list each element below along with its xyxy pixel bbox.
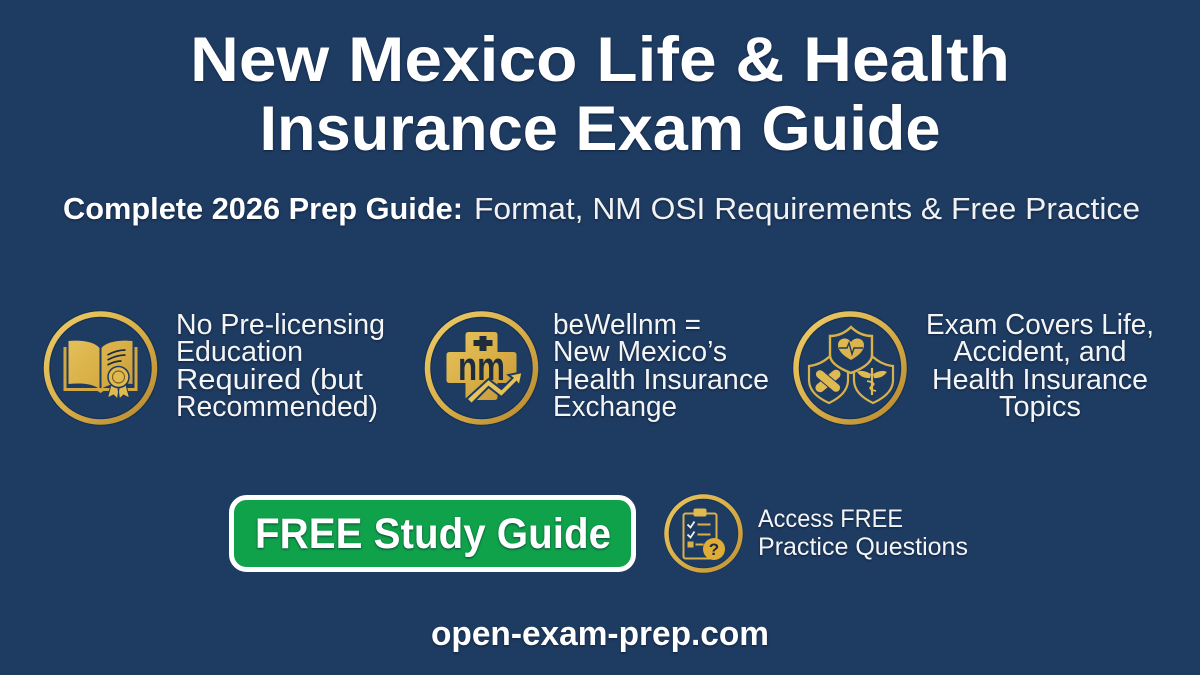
icon: medical cross with nm and arrow: nm <box>458 345 505 389</box>
text: no pre-licensing: Education <box>176 336 303 368</box>
footer url: open-exam-prep.com <box>431 615 769 653</box>
text: no pre-licensing: Recommended) <box>176 391 378 423</box>
title <box>190 25 1010 164</box>
text: bewellnm: New Mexico’s <box>553 336 727 368</box>
text: bewellnm <box>553 309 769 423</box>
icon: clipboard with question mark <box>666 496 740 570</box>
button: free study guide: FREE Study Guide <box>255 510 611 558</box>
subtitle <box>63 192 1140 226</box>
text: exam covers: Health Insurance <box>932 364 1148 396</box>
text: bewellnm: Health Insurance <box>553 364 769 396</box>
icon: clipboard with question mark: ? <box>709 540 719 559</box>
title: New Mexico Life & Health <box>190 25 1010 95</box>
text: no pre-licensing: Required (but <box>176 364 363 396</box>
text: access free practice questions <box>758 505 968 561</box>
feature: no pre-licensing education <box>46 309 385 423</box>
text: exam covers: Topics <box>999 391 1081 423</box>
text: exam covers: Exam Covers Life, <box>926 309 1154 341</box>
feature: beWellnm <box>428 309 769 423</box>
button: free study guide <box>232 498 634 570</box>
title: Insurance Exam Guide <box>260 94 940 164</box>
icon: medical cross with nm and arrow <box>428 314 536 422</box>
text: no pre-licensing <box>176 309 385 423</box>
text: exam covers <box>926 309 1154 423</box>
text: exam covers: Accident, and <box>954 336 1126 368</box>
text: access free practice questions: Access FREE <box>758 505 903 533</box>
text: bewellnm: Exchange <box>553 391 677 423</box>
feature: exam coverage <box>796 309 1154 423</box>
icon: open book with ribbon <box>46 314 154 422</box>
text: no pre-licensing: No Pre-licensing <box>176 309 385 341</box>
text: access free practice questions: Practice Questions <box>758 533 968 561</box>
subtitle: Complete 2026 Prep Guide: <box>63 192 463 226</box>
subtitle: Format, NM OSI Requirements & Free Practice <box>474 192 1140 226</box>
text: bewellnm: beWellnm = <box>553 309 701 341</box>
icon: three shields <box>796 314 904 422</box>
